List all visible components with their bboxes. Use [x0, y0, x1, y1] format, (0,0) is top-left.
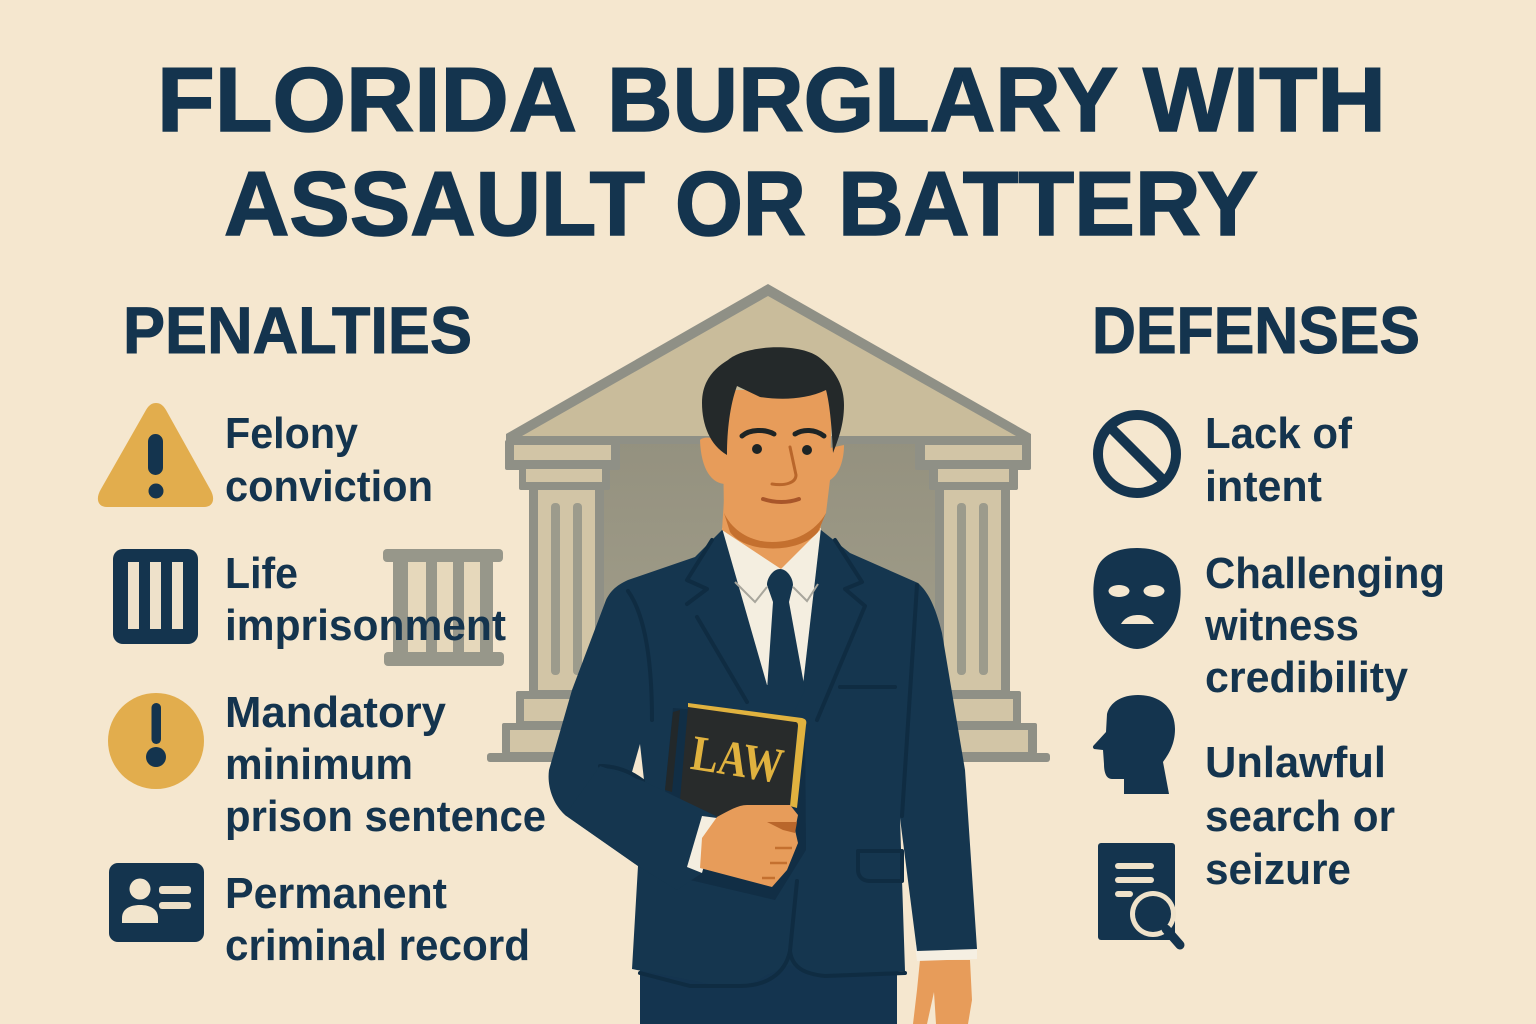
neck [722, 500, 826, 569]
text: mandatory minimum: minimum [225, 740, 413, 789]
text: mandatory minimum: Mandatory [225, 688, 447, 737]
icon: alert circle [108, 693, 204, 789]
text: felony conviction: Felony [225, 409, 358, 458]
title: BATTERY [838, 154, 1258, 255]
text: permanent record: Permanent [225, 869, 447, 918]
title: ASSAULT [224, 154, 645, 255]
text: challenging witness credibility [1204, 549, 1445, 702]
icon: id card [109, 863, 204, 942]
heading: penalties: PENALTIES [123, 293, 472, 367]
icon: head profile [1093, 695, 1175, 794]
shirt cuff [687, 816, 717, 873]
courthouse illustration [487, 284, 1050, 762]
text: life imprisonment: Life [225, 549, 298, 598]
text: challenging witness credibility: Challenging [1205, 549, 1445, 598]
text: felony conviction [225, 409, 433, 511]
text: life imprisonment: imprisonment [225, 601, 506, 650]
text: mandatory minimum [225, 688, 546, 841]
visible hand [913, 960, 972, 1024]
text: permanent record [225, 869, 530, 970]
icon: prison bars [113, 549, 198, 644]
icon: document with magnifier [1098, 843, 1180, 945]
collar line [735, 582, 818, 602]
text: unlawful search or seizure: seizure [1205, 845, 1351, 894]
lawyer figure [549, 347, 977, 1024]
tie [767, 569, 805, 720]
trousers [640, 965, 897, 1024]
title [157, 50, 1386, 255]
text: life imprisonment [225, 549, 506, 650]
eyes [752, 444, 762, 454]
text: lack of intent: Lack of [1205, 409, 1352, 458]
text: challenging witness credibility: witness [1204, 601, 1359, 650]
icon: grey jail bars [383, 549, 504, 666]
text: unlawful search or seizure [1205, 738, 1395, 894]
law book [665, 703, 806, 900]
title: FLORIDA [157, 50, 577, 151]
white cuff [915, 945, 977, 961]
text: lack of intent: intent [1205, 462, 1322, 511]
white gap [632, 744, 644, 780]
title: WITH [1143, 50, 1386, 151]
text: challenging witness credibility: credibility [1205, 653, 1409, 702]
holding hand [700, 805, 798, 887]
title: BURGLARY [607, 50, 1118, 151]
icon: warning triangle [98, 403, 213, 507]
head [700, 347, 844, 542]
text: permanent record: criminal record [225, 921, 530, 970]
sleeve over book [565, 766, 718, 890]
text: lack of intent [1205, 409, 1352, 511]
text: mandatory minimum: prison sentence [225, 792, 546, 841]
text: felony conviction: conviction [225, 462, 433, 511]
law book: LAW [688, 724, 787, 794]
title: OR [675, 154, 806, 255]
lapel lines [600, 540, 917, 986]
text: unlawful search or seizure: Unlawful [1205, 738, 1386, 787]
icon: mask [1093, 548, 1181, 649]
jacket [549, 530, 977, 986]
icon: prohibition sign [1098, 415, 1176, 493]
text: unlawful search or seizure: search or [1205, 792, 1395, 841]
shirt [722, 528, 821, 685]
heading: defenses: DEFENSES [1092, 293, 1420, 367]
hair [702, 347, 844, 455]
